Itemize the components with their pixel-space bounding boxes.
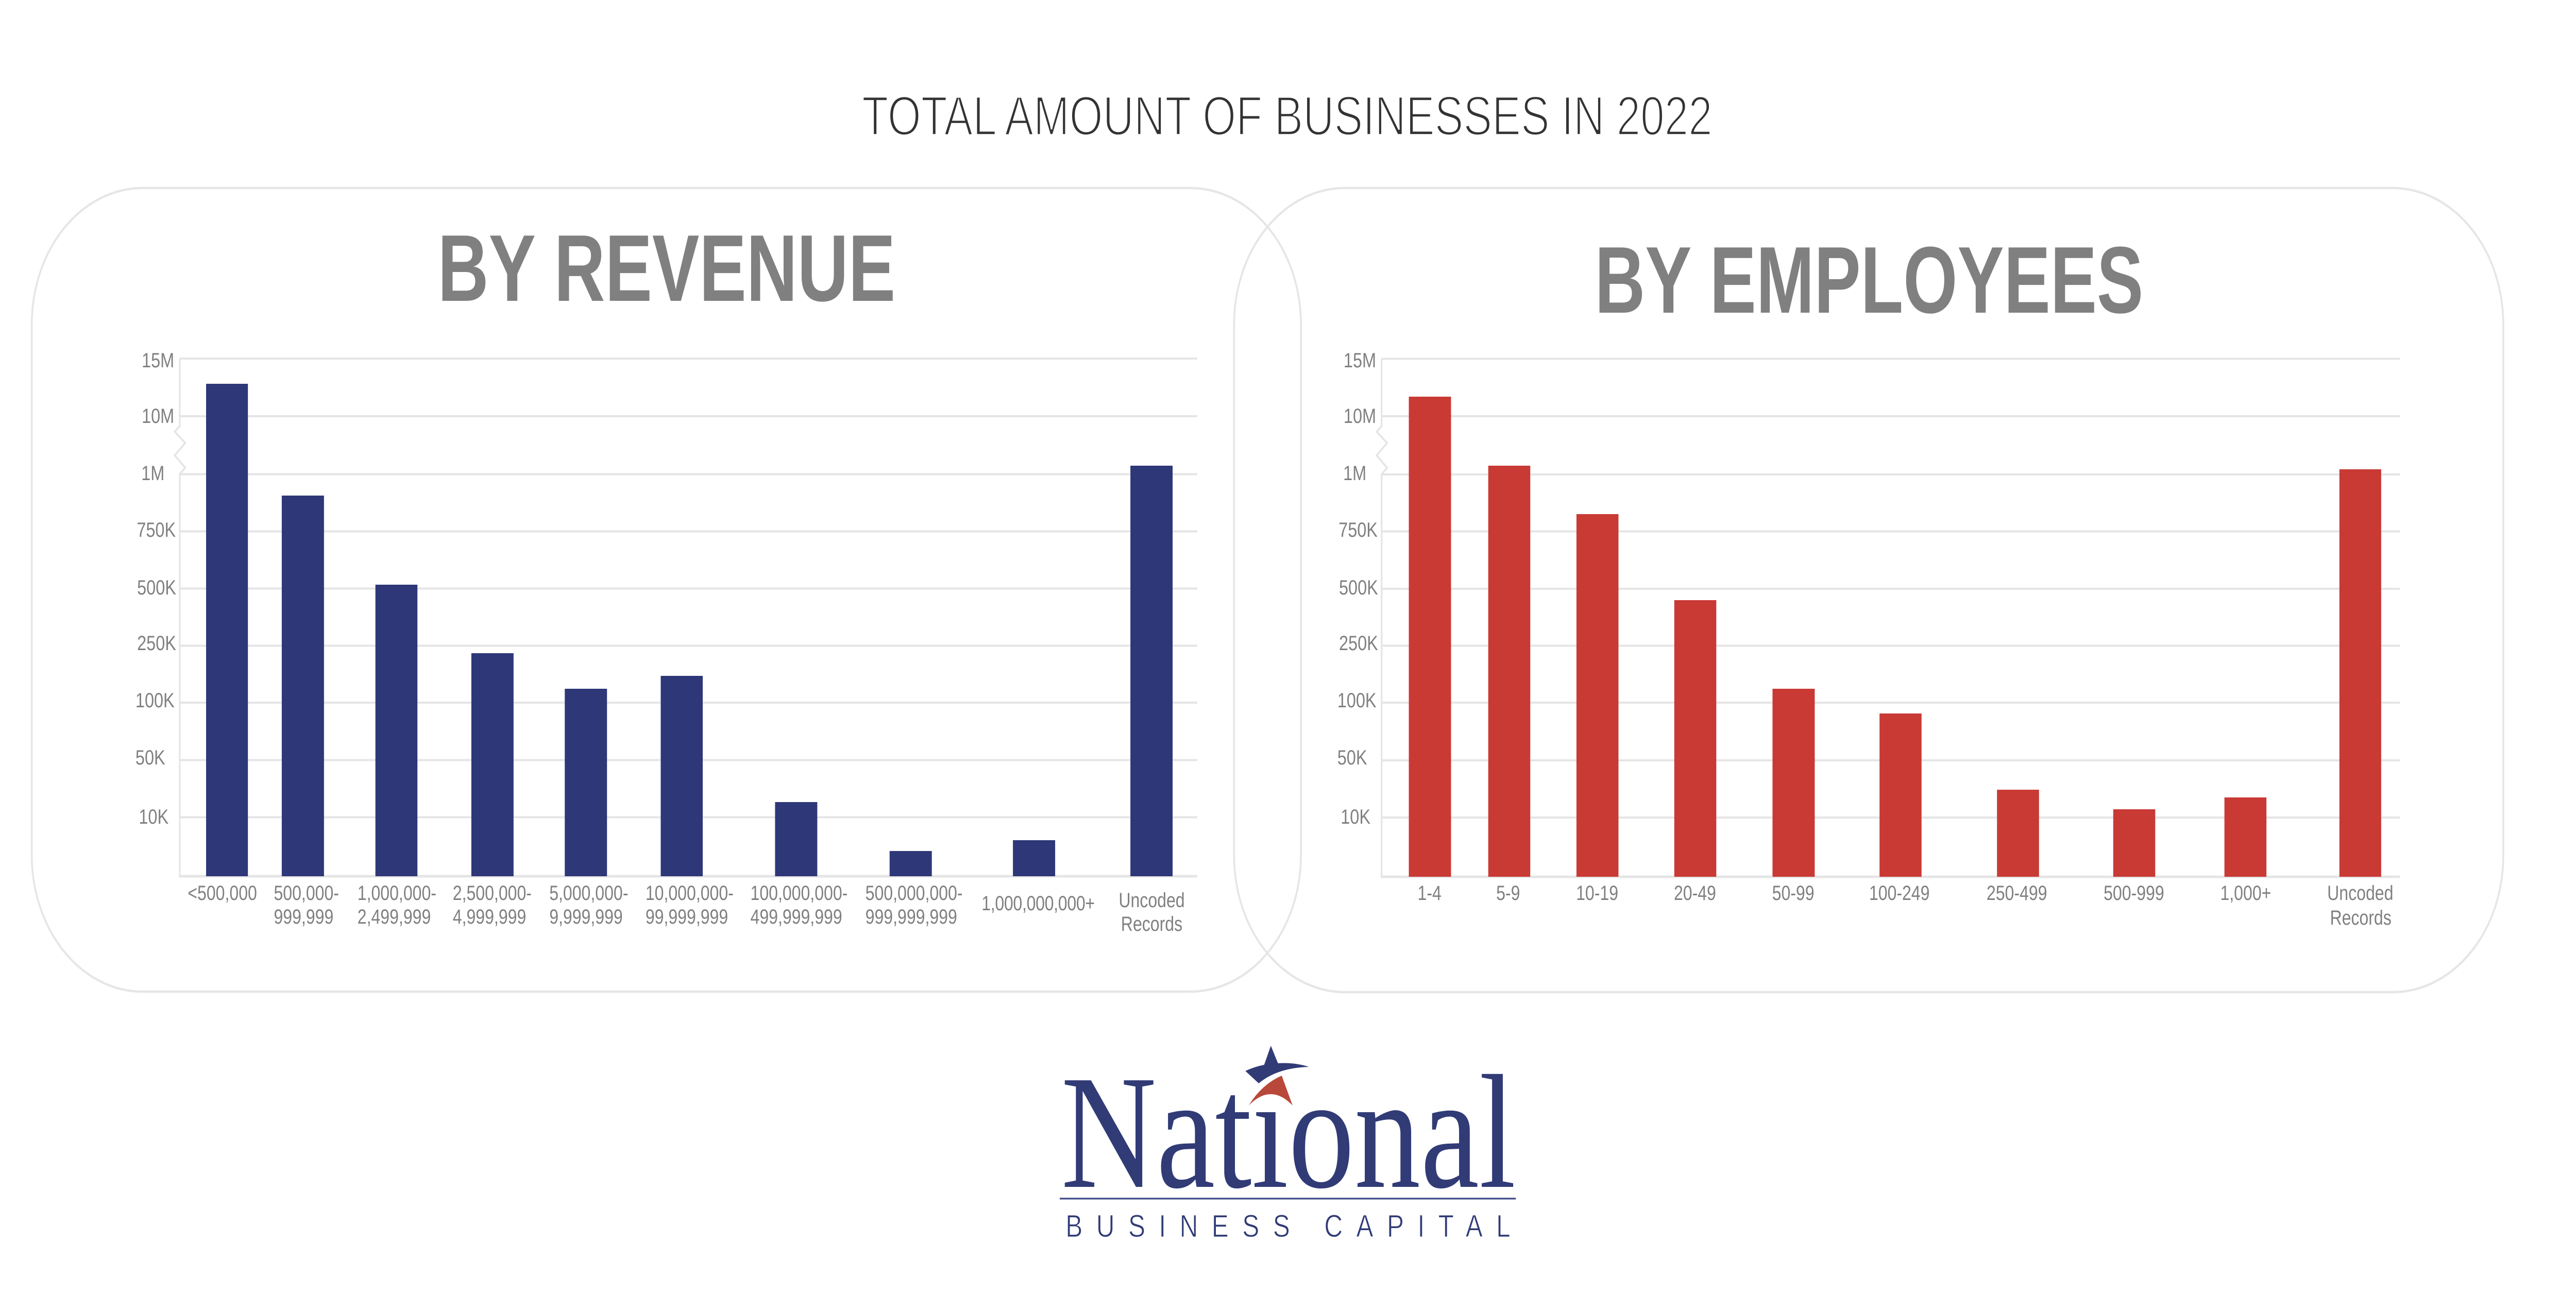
x axis labels: employees: 50-99 [1772, 881, 1815, 905]
x axis labels: employees: 500-999 [2104, 881, 2164, 905]
bars: revenue [206, 384, 1173, 876]
y axis labels: 50K [135, 746, 165, 769]
x axis labels: revenue: 4,999,999 [453, 905, 526, 928]
x axis labels: employees: 100-249 [1869, 881, 1929, 905]
x axis labels: revenue: 10,000,000- [646, 881, 734, 905]
y axis labels: 500K [137, 576, 176, 599]
y axis labels: 250K [1339, 632, 1378, 655]
y axis labels: 100K [135, 689, 175, 712]
x axis labels: employees: 1,000+ [2220, 881, 2271, 905]
x axis labels: revenue: 499,999,999 [751, 905, 842, 928]
y axis labels: 10K [139, 805, 168, 828]
y axis labels: 750K [137, 518, 176, 541]
x axis labels: employees: Records [2330, 906, 2392, 929]
y axis labels: 1M [1343, 462, 1366, 485]
panel outline: by employees [1234, 188, 2503, 992]
x axis labels: revenue: 5,000,000- [549, 881, 628, 905]
x axis labels: revenue: 999,999,999 [866, 905, 957, 928]
y axis labels: 10M [1344, 404, 1376, 428]
x axis labels: employees [1418, 881, 2393, 929]
logo wordmark: Natıonal [1061, 1043, 1516, 1222]
y axis labels: 50K [1337, 746, 1367, 769]
x axis labels: employees: 5-9 [1496, 881, 1520, 905]
panel: by employees [1234, 188, 2503, 992]
panel: by revenue [32, 188, 1301, 992]
x axis labels: revenue: 2,500,000- [453, 881, 532, 905]
y axis labels [135, 349, 176, 828]
x axis labels: employees: Uncoded [2327, 881, 2393, 905]
x axis labels: revenue: 500,000- [274, 881, 339, 905]
x axis labels: revenue: Records [1121, 912, 1182, 935]
y axis labels: 500K [1339, 576, 1378, 599]
x axis labels: employees: 250-499 [1987, 881, 2047, 905]
x axis labels: revenue: 9,999,999 [549, 905, 623, 928]
x axis labels: revenue: 500,000,000- [866, 881, 962, 905]
y axis labels: 750K [1338, 518, 1378, 541]
icon: star [1245, 1046, 1309, 1105]
bar chart: businesses by revenue [135, 349, 1197, 935]
y axis labels: 250K [137, 632, 176, 655]
bars: employees [1409, 397, 2381, 877]
y axis with break [1377, 359, 1387, 877]
y axis labels: 1M [141, 462, 164, 485]
y axis labels: 15M [1344, 349, 1376, 372]
x axis labels: employees: 20-49 [1674, 881, 1716, 905]
x axis labels: employees: 1-4 [1418, 881, 1442, 905]
y axis labels: 15M [142, 349, 174, 372]
heading: by employees: BY EMPLOYEES [1595, 227, 2143, 333]
x axis labels: revenue: 100,000,000- [751, 881, 848, 905]
logo tagline: BUSINESS CAPITAL [1065, 1209, 1511, 1244]
y axis labels: 100K [1337, 689, 1377, 712]
x axis labels: revenue: 1,000,000,000+ [981, 892, 1095, 915]
x axis labels: employees: 10-19 [1576, 881, 1618, 905]
heading: by revenue: BY REVENUE [438, 215, 895, 321]
title: TOTAL AMOUNT OF BUSINESSES IN 2022 [862, 84, 1713, 147]
logo rule [1060, 1198, 1516, 1199]
y axis labels: 10K [1341, 805, 1370, 828]
logo: National Business Capital [1060, 1043, 1516, 1244]
x axis labels: revenue [188, 881, 1185, 935]
x axis labels: revenue: Uncoded [1118, 889, 1185, 912]
x axis labels: revenue: 999,999 [274, 905, 333, 928]
x axis labels: revenue: 99,999,999 [646, 905, 728, 928]
panel outline: by revenue [32, 188, 1301, 992]
y axis with break [175, 359, 185, 876]
x axis labels: revenue: <500,000 [188, 881, 257, 905]
y axis labels: 10M [142, 404, 174, 428]
bar chart: businesses by employees [1337, 349, 2400, 929]
x axis labels: revenue: 1,000,000- [358, 881, 436, 905]
y axis labels [1337, 349, 1378, 828]
x axis labels: revenue: 2,499,999 [358, 905, 431, 928]
